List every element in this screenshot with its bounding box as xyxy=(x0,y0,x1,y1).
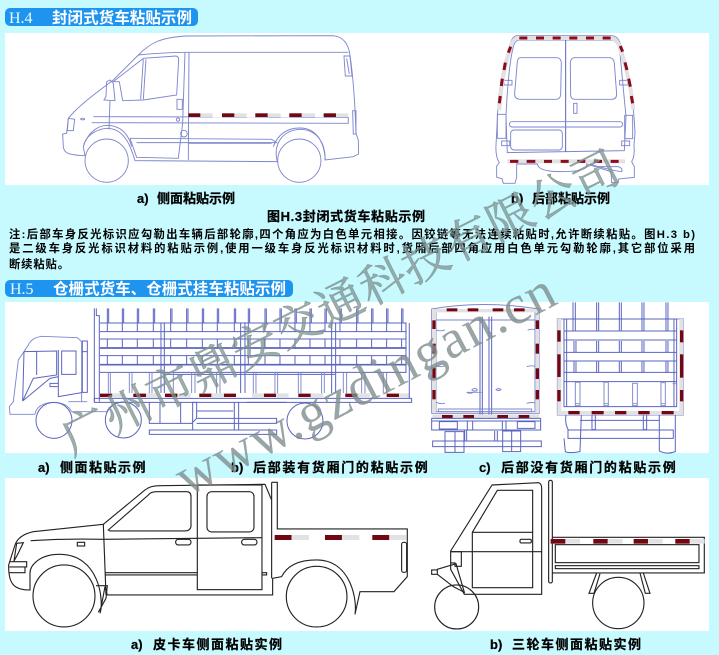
illustration: van side view xyxy=(63,36,359,182)
heading: H.4: 封闭式货车粘贴示例 xyxy=(52,8,192,27)
panel: pickup and tricycle background xyxy=(5,478,709,631)
caption: b) 后部装有货厢门的粘贴示例: b) xyxy=(231,460,243,475)
panel: H.5 illustrations background xyxy=(5,302,709,453)
watermark: website: www.gzdingan.cn xyxy=(164,260,565,508)
reflective strip: pickup xyxy=(275,535,407,540)
caption: b) 后部粘贴示例: 后部粘贴示例 xyxy=(532,191,610,206)
illustration: tricycle side view xyxy=(432,480,705,629)
note text: 注:后部车身反光标识应勾勒出车辆后部轮廓,四个角应为白色单元相接。因铰链等无法连续粘贴时,允许断续粘贴。图H.3 b) xyxy=(9,227,695,241)
illustration: van rear view xyxy=(496,36,635,183)
caption: a) 侧面粘贴示例: a) xyxy=(137,191,149,206)
caption: a) 侧面粘贴示例: 侧面粘贴示例 xyxy=(60,460,147,475)
figure title: 图H.3封闭式货车粘贴示例 xyxy=(267,209,425,224)
reflective strip: van rear xyxy=(499,38,633,161)
illustration: pickup side view xyxy=(9,482,407,627)
heading: H.4: H.4 xyxy=(9,10,33,27)
watermark: company name: 广州市鼎安交通科技有限公司 xyxy=(49,132,630,469)
panel: H.4 illustrations background xyxy=(5,33,709,185)
reflective strip: rear frame without door xyxy=(557,319,683,415)
caption: b) 三轮车侧面粘贴实例: 三轮车侧面粘贴实例 xyxy=(512,637,643,652)
heading: H.5: 仓栅式货车、仓栅式挂车粘贴示例 xyxy=(53,279,286,298)
caption: b) 后部装有货厢门的粘贴示例: 后部装有货厢门的粘贴示例 xyxy=(253,460,429,475)
caption: b) 后部粘贴示例: b) xyxy=(511,191,523,206)
reflective strip: stake truck xyxy=(100,393,410,398)
reflective strip: tricycle xyxy=(551,539,705,544)
heading: H.4 xyxy=(5,8,198,27)
reflective strip: rear door frame xyxy=(432,308,539,418)
caption: c) 后部没有货厢门的粘贴示例: 后部没有货厢门的粘贴示例 xyxy=(501,460,677,475)
caption: c) 后部没有货厢门的粘贴示例: c) xyxy=(479,460,491,475)
note text xyxy=(9,227,695,271)
caption: a) 皮卡车侧面粘贴实例: 皮卡车侧面粘贴实例 xyxy=(153,637,284,652)
illustration: stake truck side view xyxy=(9,308,412,439)
note text: 是二级车身反光标识材料的粘贴示例,使用一级车身反光标识材料时,货厢后部四角应用白色单元勾勒轮廓,其它部位采用 xyxy=(9,241,695,255)
caption: a) 侧面粘贴示例: a) xyxy=(38,460,50,475)
caption: b) 三轮车侧面粘贴实例: b) xyxy=(490,637,502,652)
note text: 断续粘贴。 xyxy=(9,257,69,271)
caption: a) 侧面粘贴示例: 侧面粘贴示例 xyxy=(157,191,235,206)
heading: H.5: H.5 xyxy=(10,281,34,298)
caption: a) 皮卡车侧面粘贴实例: a) xyxy=(131,637,143,652)
reflective strip: van side xyxy=(188,113,348,117)
illustration: stake truck rear view with doors xyxy=(432,302,683,453)
